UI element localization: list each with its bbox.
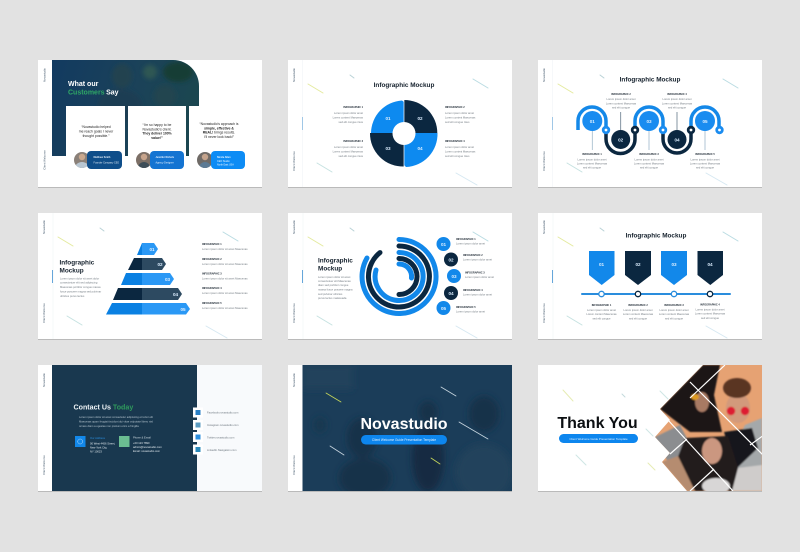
text: right labels: INFOGRAPHIC 2 [445,106,465,109]
social links: LinkedIn.Navigation.com [207,448,237,452]
text: contact description: ornare diam a egestas non pretium enim a fringilla [79,424,139,428]
testimonial card 3: REAL! brings results. [203,131,235,135]
social links [193,408,239,454]
sidebar: pie slide [292,68,296,171]
sidebar: contact slide: Novastudio [42,373,46,387]
sidebar: radial slide: Novastudio [292,220,296,234]
sidebar: testimonials slide: Client Welcome [42,150,46,170]
panel: wave timeline slide [538,60,762,188]
text: top labels: Lorem ipsum dolor amet [663,97,692,101]
right light column [197,365,262,491]
text: timeline labels: Lorem ipsum dolor amet [587,308,616,312]
numbered legend: Lorem ipsum dolor amet [456,310,485,314]
wave diagram: 01 [590,119,595,124]
text: right labels: sed elit congue risus [445,154,470,158]
text: left labels: Lorem content Maecenas [333,150,364,154]
wave diagram: 05 [702,119,708,124]
pie chart: 01 [385,116,391,121]
pyramid chart: 03 [165,277,170,282]
text: timeline labels: INFOGRAPHIC 4 [700,304,720,306]
text: top labels [606,93,693,110]
heading: Mockup [318,266,342,272]
panel: pie infographic slide [288,60,512,188]
wave diagram: 03 [646,119,652,124]
numbered legend: INFOGRAPHIC 1 [456,238,476,241]
testimonial card 1 [66,106,125,174]
testimonial card 1: “Novastudio helped [81,125,111,129]
text: description: ultricies purus lectus [60,294,85,298]
panel: thank you slide [538,365,770,494]
subtitle pill [361,435,447,444]
pyramid chart: 05 [180,307,186,312]
numbered legend: INFOGRAPHIC 2 [463,254,483,257]
pyramid chart: 02 [157,262,163,267]
subtitle pill [559,434,638,443]
text: top labels: sed elit congue [612,106,631,110]
phone and email block: Email: novastudio.com [133,449,161,453]
numbered legend: 01 [441,242,446,247]
social links: Instagram.novastudio.com [207,423,239,427]
timeline [581,291,731,297]
background photo with dark overlay [302,365,512,500]
testimonial card 2 [128,106,186,174]
testimonial card 2: Novastudio's client. [142,127,172,131]
numbered legend [436,237,494,315]
text: timeline labels: Lorem ipsum dolor amet [696,308,725,312]
pie chart: 02 [417,116,423,121]
shield markers: 03 [671,262,677,267]
text: right labels: Lorem content Maecenas [445,116,476,120]
testimonial card 3: “Novastudio's approach is [200,122,239,126]
text: pyramid labels [202,243,248,310]
testimonial card 2: “I'm so happy to be [143,123,171,127]
text: description: Lorem ipsum dolor sit amet dolor [60,276,99,280]
heading: Infographic Mockup [626,232,686,240]
testimonial card 2: value!” [151,136,163,140]
text: left labels [333,106,364,158]
text: timeline labels: INFOGRAPHIC 2 [628,304,648,307]
text: contact description: Maecenas quam feugiat tincidunt dui vitae vulputate libero nisl [79,420,153,424]
panel: shield timeline slide [538,213,762,340]
text: description [318,275,353,300]
sidebar: pie slide: Client Welcome [292,151,296,171]
heading: what our customers say: Say [106,90,119,96]
subtitle pill: Client Welcome Guide Presentation Template [372,438,436,442]
text: bottom labels: sed elit congue [583,166,602,170]
text: left labels: Lorem content Maecenas [333,116,364,120]
shield markers: 02 [635,262,641,267]
shield markers: 04 [707,262,713,267]
text: timeline labels: INFOGRAPHIC 1 [592,304,612,307]
testimonial card 2: Agency Designer [156,162,174,164]
testimonial card 3 [189,106,245,169]
heading: Infographic [318,258,353,264]
dark contact panel [52,365,197,491]
text: left labels: INFOGRAPHIC 1 [343,106,364,109]
sidebar: title slide: Novastudio [292,373,296,387]
heading: Infographic Mockup [374,82,434,89]
text: timeline labels: INFOGRAPHIC 3 [664,304,684,307]
pyramid chart: 01 [149,247,155,252]
text: description: consectetuer elit Maecenas [318,279,351,283]
text: description [60,276,101,298]
testimonial card 1: Founder Company CEO [94,162,119,164]
text: left labels: INFOGRAPHIC 3 [343,140,364,143]
text: bottom labels: INFOGRAPHIC 3 [639,153,659,156]
wave diagram: 02 [618,138,624,142]
text: pyramid labels: INFOGRAPHIC 4 [202,287,222,290]
text: pyramid labels: INFOGRAPHIC 5 [202,302,222,305]
panel: radial bars slide [288,213,512,340]
text: timeline labels [586,304,726,320]
text: pyramid labels: Lorem ipsum dolor sit amet Maecenas [202,306,248,310]
accent lines [326,387,488,464]
text: right labels: Lorem ipsum dolor amet [445,145,474,149]
text: right labels: sed elit congue risus [445,120,470,124]
heading: Mockup [60,268,84,274]
phone and email block: admin@novastudio.com [133,445,163,449]
panel: title slide [288,365,512,500]
text: top labels: sed elit congue [668,106,687,110]
shield markers [589,251,723,285]
sidebar: radial slide: Client Welcome [292,303,296,323]
heading: what our customers say: Customers [68,90,105,96]
title: novastudio: Novastudio [360,416,448,433]
panel: pyramid slide [38,213,262,340]
testimonial card 3: CEO Studio [217,160,230,163]
sidebar: testimonials slide [42,68,46,170]
sidebar: wave slide: Client Welcome [542,151,546,171]
sidebar: contact slide: Client Welcome [42,455,46,475]
pie chart [370,100,438,167]
text: top labels: Lorem ipsum dolor amet [607,97,636,101]
sidebar: testimonials slide: Novastudio [42,68,46,82]
text: bottom labels: Lorem ipsum dolor amet [691,158,720,162]
text: description: massa fusce posuere magna [318,288,353,292]
text: bottom labels: INFOGRAPHIC 1 [582,153,602,156]
text: pyramid labels: Lorem ipsum dolor sit amet Maecenas [202,247,248,251]
text: timeline labels: sed elit congue [665,316,684,320]
text: bottom labels: Lorem content Maecenas [690,162,721,166]
sidebar: shield slide [542,220,546,323]
phone and email block: Phone & Email [133,436,151,440]
heading: Infographic [60,260,95,266]
text: timeline labels: Lorem content Maecenas [695,312,726,316]
panel: contact slide [38,365,262,492]
pie chart: 03 [385,146,391,151]
address block [75,436,115,454]
radial bar chart [362,239,436,313]
phone and email block [119,436,163,453]
testimonial card 3: I'll never look back!” [204,135,234,139]
photo header panel [52,60,199,156]
testimonial card 2: Jennifer Nichols [156,156,175,159]
text: pyramid labels: INFOGRAPHIC 1 [202,243,222,246]
text: timeline labels: sed elit congue [701,316,720,320]
heading: thank you: Thank You [557,415,638,432]
sidebar: wave slide [542,68,546,171]
sidebar: pyramid slide [42,220,46,323]
text: left labels: Lorem ipsum dolor amet [334,145,363,149]
sidebar: pyramid slide: Novastudio [42,220,46,234]
sidebar: title slide [292,373,296,475]
testimonial card 2: They deliver 100% [142,132,172,136]
sidebar: radial slide [292,220,296,323]
sidebar: shield slide: Client Welcome [542,303,546,323]
sidebar: title slide: Client Welcome [292,455,296,475]
numbered legend: 04 [448,291,454,296]
text: bottom labels: Lorem ipsum dolor amet [578,158,607,162]
sidebar: pie slide: Novastudio [292,68,296,82]
wave diagram [578,107,724,154]
pyramid chart: 04 [173,292,178,297]
numbered legend: INFOGRAPHIC 5 [456,306,476,309]
testimonial card 1: me reach goals I never [79,130,114,134]
text: timeline labels: sed elit congue [592,316,611,320]
text: contact description [79,415,153,428]
text: left labels: sed elit congue risus [338,120,364,124]
text: pyramid labels: Lorem ipsum dolor sit amet Maecenas [202,262,248,266]
text: left labels: Lorem ipsum dolor amet [334,111,363,115]
text: right labels: Lorem content Maecenas [445,150,476,154]
wave diagram: 04 [674,138,680,142]
sidebar: contact slide [42,373,46,475]
subtitle pill: Client Welcome Guide Presentation Template [569,437,628,441]
address block: New York City, [90,446,108,450]
text: bottom labels: INFOGRAPHIC 5 [695,153,715,156]
text: pyramid labels: Lorem ipsum dolor sit amet Maecenas [202,291,248,295]
testimonial card 1: Matthew Smith [94,156,111,159]
text: bottom labels: Lorem content Maecenas [634,162,665,166]
text: left labels: sed elit congue risus [338,154,364,158]
shield markers: 01 [599,262,604,267]
text: bottom labels [577,153,721,170]
text: right labels: INFOGRAPHIC 4 [445,140,465,143]
photo collage [655,365,762,491]
text: bottom labels: Lorem content Maecenas [577,162,608,166]
heading: contact us today: Contact Us Today [74,404,133,412]
text: description: diam sed porttitor congue [318,283,349,287]
numbered legend: 03 [451,274,457,279]
sidebar: pyramid slide: Client Welcome [42,303,46,323]
address block: NY 10023 [90,450,102,454]
testimonial card 3: Nicole Allen [217,156,231,159]
text: pyramid labels: INFOGRAPHIC 3 [202,272,222,276]
numbered legend: Lorem ipsum dolor amet [463,258,492,262]
text: timeline labels: Lorem content Maecenas [623,312,654,316]
text: description: Lorem ipsum dolor sit amet [318,275,351,279]
address block: Our Address [90,436,106,440]
text: timeline labels: Lorem ipsum dolor amet [660,308,689,312]
text: bottom labels: sed elit congue [640,166,659,170]
pie chart: 04 [417,146,423,151]
heading: Infographic Mockup [620,76,680,84]
panel: testimonials slide [38,60,262,188]
testimonial card 3: simple, effective & [204,126,234,130]
heading: what our customers say: What our [68,81,99,88]
text: contact description: Lorem ipsum dolor sit amet consectetur adipiscing et tortor elit [79,415,153,419]
text: bottom labels: Lorem ipsum dolor amet [635,158,664,162]
numbered legend: Lorem ipsum dolor amet [456,242,485,246]
numbered legend: 05 [441,306,446,311]
text: top labels: Lorem content Maecenas [662,102,693,106]
text: pyramid labels: INFOGRAPHIC 2 [202,258,222,261]
text: top labels: INFOGRAPHIC 4 [667,93,687,96]
sidebar: shield slide: Novastudio [542,220,546,234]
testimonial card 3: North East USA [217,164,234,166]
numbered legend: INFOGRAPHIC 4 [463,289,483,292]
numbered legend: Lorem ipsum dolor amet [465,275,494,279]
social links: Facebook.novastudio.com [207,410,239,414]
text: right labels: Lorem ipsum dolor amet [445,111,474,115]
text: description: sed pulvinar ultricies [318,292,343,296]
text: description: purus lectus malesuada [318,296,347,300]
text: top labels: Lorem content Maecenas [606,102,637,106]
social links: Twitter.novastudio.com [207,436,235,440]
text: pyramid labels: Lorem ipsum dolor sit amet Maecenas [202,276,248,280]
text: timeline labels: Lorem ipsum dolor amet [624,308,653,312]
sidebar: wave slide: Novastudio [542,68,546,82]
numbered legend: INFOGRAPHIC 3 [465,272,485,274]
pyramid chart [106,243,190,314]
numbered legend: 02 [448,258,454,262]
text: timeline labels: sed elit congue [629,316,648,320]
phone and email block: +00 123 7890 [133,441,150,445]
text: top labels: INFOGRAPHIC 2 [611,93,631,96]
address block: 00 West 4456 Street, [90,442,115,446]
testimonial card 1: thought possible.” [83,134,109,138]
text: bottom labels: sed elit congue [696,166,715,170]
text: right labels [445,106,476,158]
text: description: consectetuer elit sed adipiscing [60,280,98,284]
text: timeline labels: Lorem content Maecenas [659,312,690,316]
text: description: Maecenas porttitor congue massa [60,285,101,289]
text: timeline labels: Lorem content Maecenas [586,312,617,316]
numbered legend: Lorem ipsum dolor amet [463,292,492,296]
text: description: fusce posuere magna sed pulvinar [60,290,101,294]
